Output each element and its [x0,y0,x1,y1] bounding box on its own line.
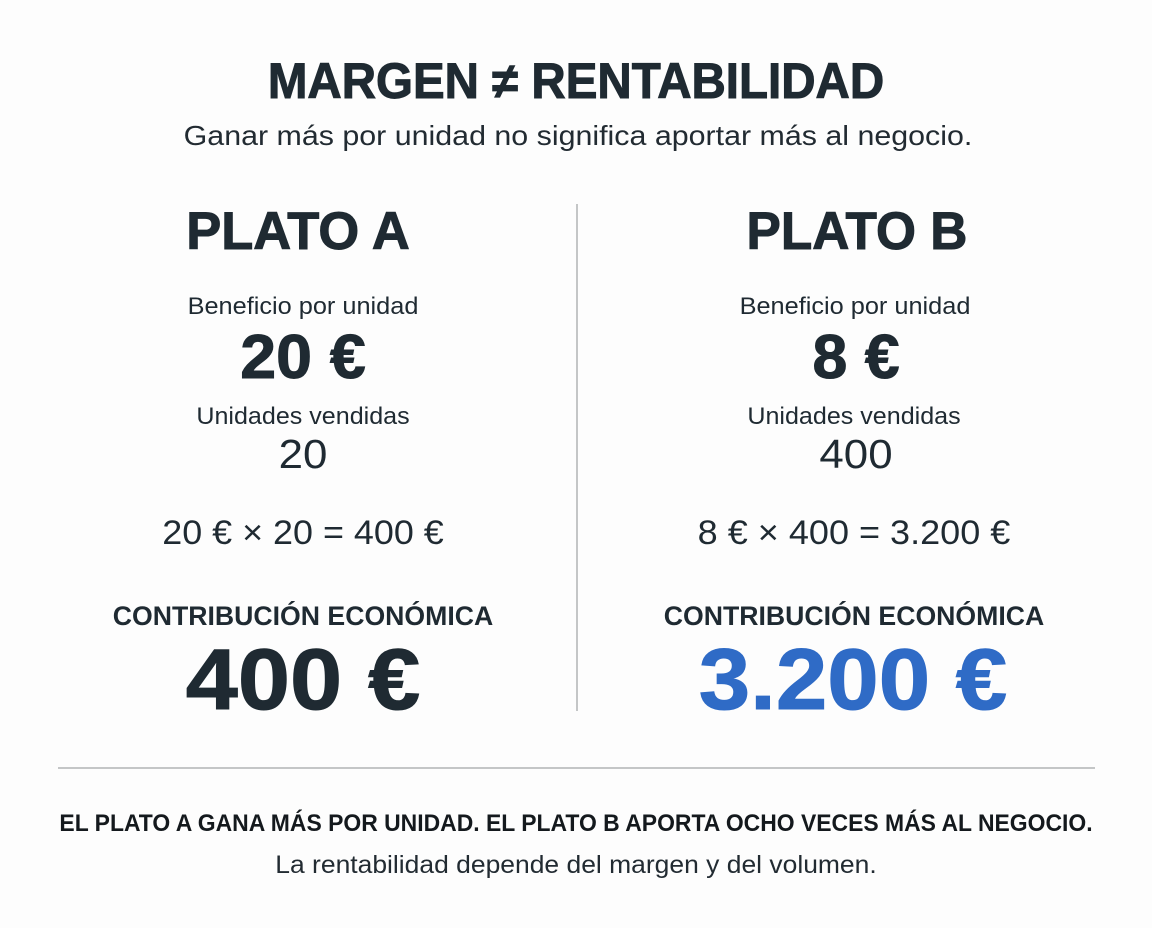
label: unidades A: Unidades vendidas [196,403,410,430]
value: beneficio B: 8 € [812,323,900,392]
panel: plato B [664,202,1044,728]
label: contribución B: CONTRIBUCIÓN ECONÓMICA [664,601,1044,631]
value: contribución A: 400 € [186,632,420,728]
value: beneficio A: 20 € [240,323,366,392]
value: unidades B: 400 [819,431,893,477]
value: unidades A: 20 [279,431,327,477]
formula A: 20 € × 20 = 400 € [162,514,444,552]
conclusion: closing line: La rentabilidad depende del margen y del volumen. [275,851,877,879]
title: MARGEN ≠ RENTABILIDAD [268,53,884,109]
panel: plato A [113,202,493,728]
value: contribución B: 3.200 € [699,632,1007,728]
label: beneficio A: Beneficio por unidad [188,293,418,320]
heading: plato A: PLATO A [186,202,410,261]
label: contribución A: CONTRIBUCIÓN ECONÓMICA [113,601,493,631]
label: beneficio B: Beneficio por unidad [740,293,970,320]
heading: plato B: PLATO B [747,202,967,261]
conclusion: bold statement: EL PLATO A GANA MÁS POR UNIDAD. EL PLATO B APORTA OCHO VECES MÁS AL NEGOCIO. [59,810,1093,837]
divider: horizontal [58,767,1095,769]
divider: vertical [576,204,578,711]
subtitle: Ganar más por unidad no significa aportar más al negocio. [184,120,972,151]
label: unidades B: Unidades vendidas [747,403,961,430]
formula B: 8 € × 400 = 3.200 € [698,514,1010,552]
